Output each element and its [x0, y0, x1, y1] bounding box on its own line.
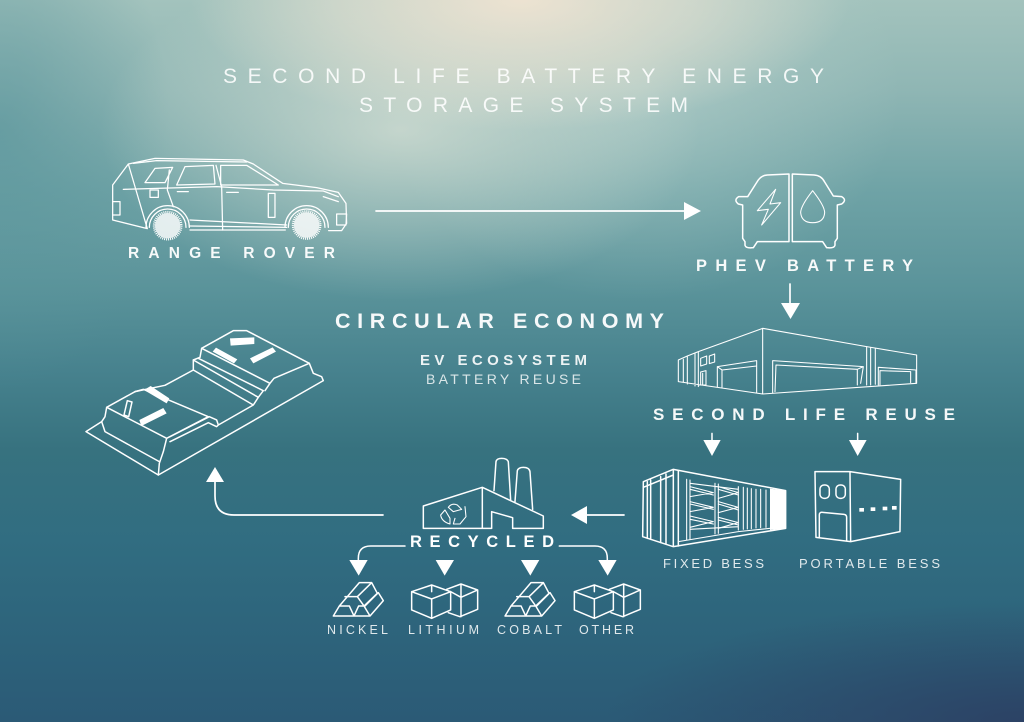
icon: battery pack — [86, 331, 323, 475]
icon: cobalt bars — [505, 583, 555, 616]
title: STORAGE SYSTEM — [359, 94, 688, 117]
title: SECOND LIFE BATTERY ENERGY — [223, 65, 824, 88]
icon: recycling factory — [423, 458, 543, 528]
label: nickel: NICKEL — [327, 623, 388, 637]
heading: circular economy: CIRCULAR ECONOMY — [335, 309, 664, 333]
icon: lithium boxes — [412, 584, 478, 618]
text: battery reuse: BATTERY REUSE — [426, 371, 581, 387]
label: other: OTHER — [579, 623, 634, 637]
label: cobalt: COBALT — [497, 623, 562, 637]
arrow: fixed bess to recycled — [571, 506, 624, 524]
arrow: car to phev — [376, 202, 701, 220]
label: phev battery: PHEV BATTERY — [696, 257, 913, 275]
icon: portable bess — [815, 472, 901, 542]
label: fixed bess: FIXED BESS — [663, 556, 764, 571]
title — [223, 65, 824, 117]
arrows: recycled branches — [349, 546, 617, 576]
arrow: phev to reuse — [781, 284, 800, 319]
label: recycled: RECYCLED — [410, 533, 554, 551]
icon: range rover car — [113, 158, 347, 239]
icon: nickel bars — [333, 583, 383, 616]
text: ev ecosystem: EV ECOSYSTEM — [420, 352, 587, 369]
icon: fixed bess container — [643, 469, 786, 547]
label: range rover: RANGE ROVER — [128, 245, 335, 262]
icon: other boxes — [574, 584, 640, 618]
label: portable bess: PORTABLE BESS — [799, 556, 940, 571]
label: lithium: LITHIUM — [408, 623, 479, 637]
icon: warehouse — [678, 328, 917, 394]
label: second life reuse: SECOND LIFE REUSE — [653, 405, 955, 424]
arrow: recycled to battery pack — [206, 467, 383, 515]
icon: phev car — [736, 174, 844, 248]
arrows: second life to bess — [703, 433, 867, 456]
